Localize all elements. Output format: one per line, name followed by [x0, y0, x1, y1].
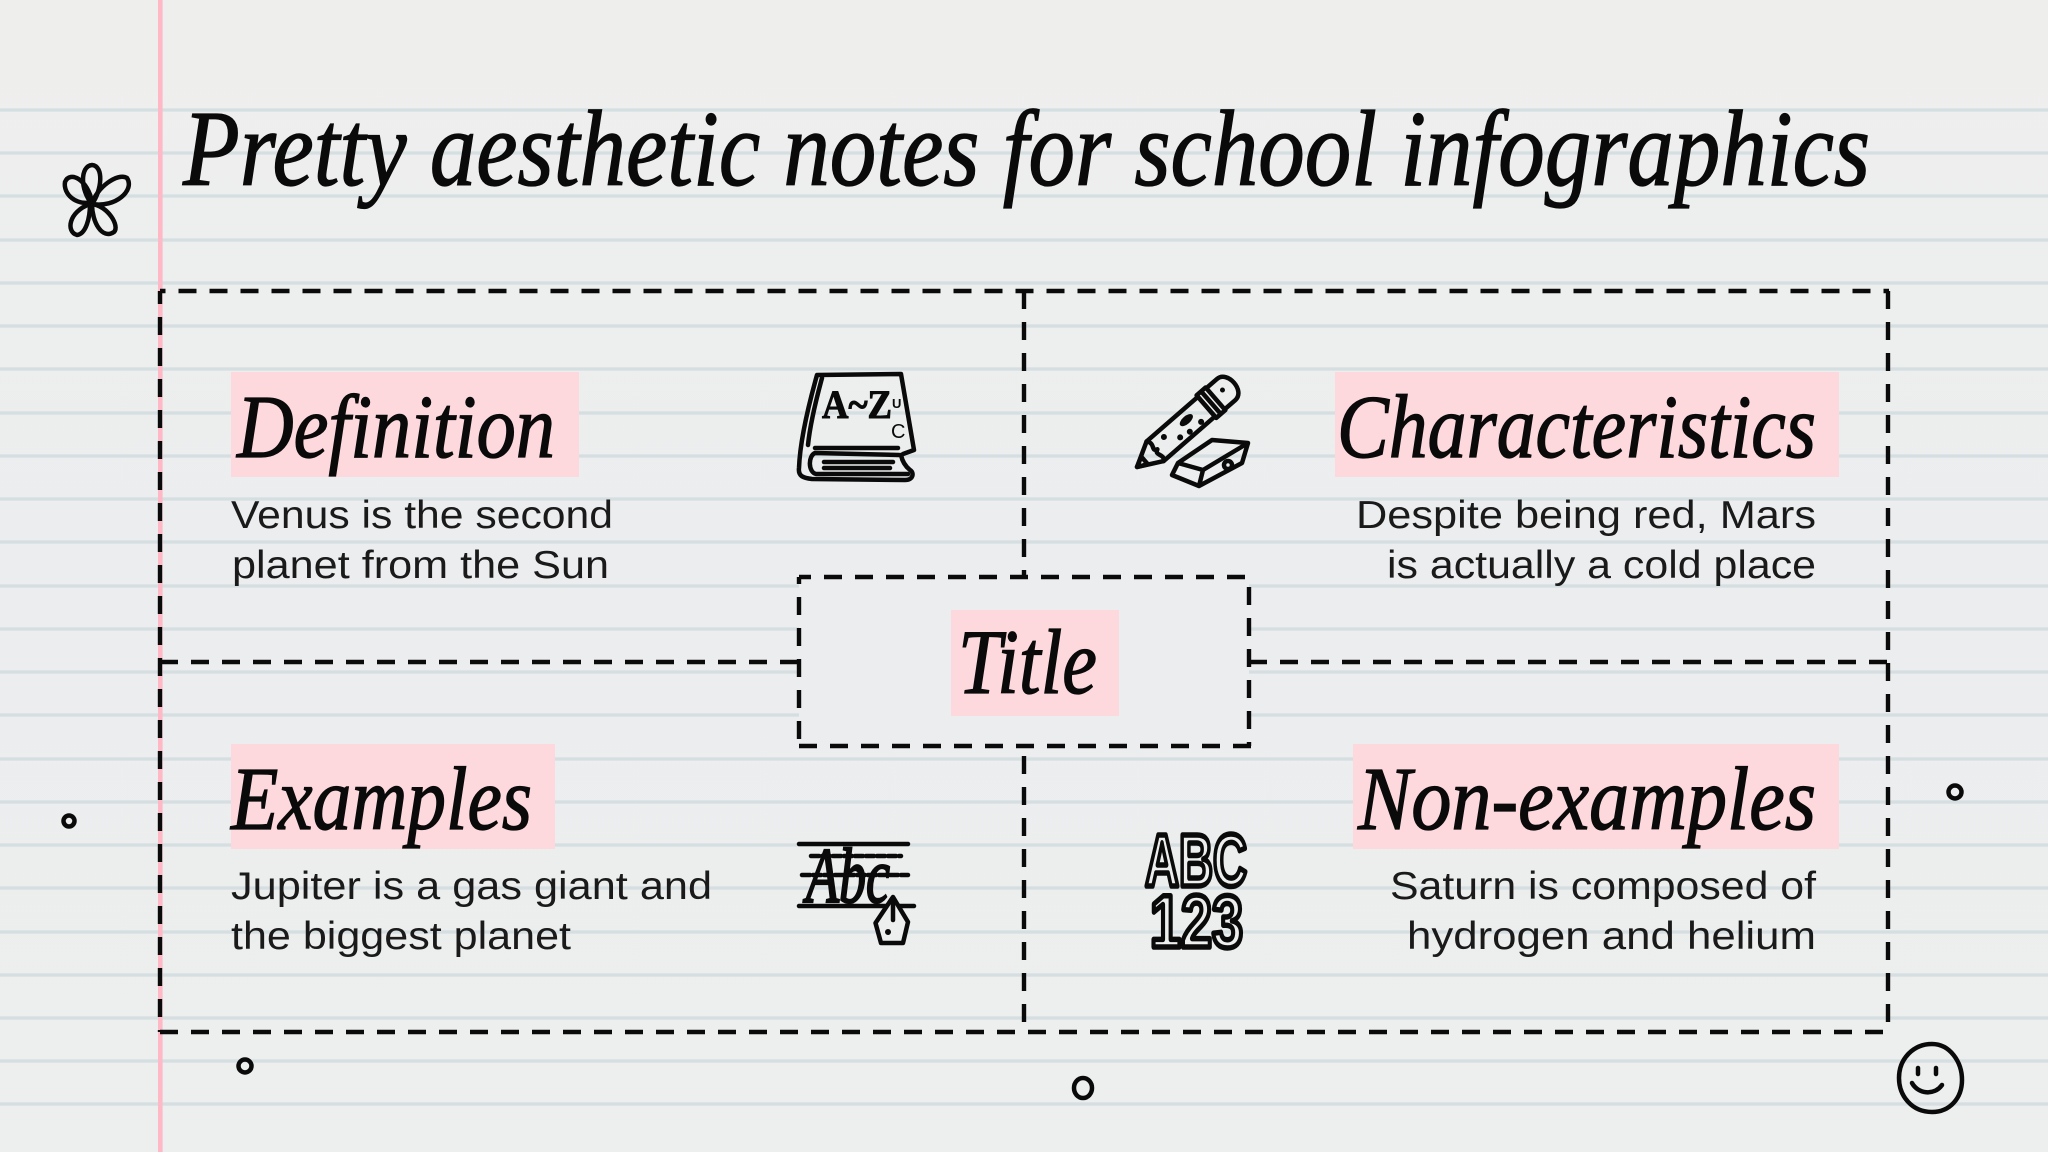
panel: definition	[231, 372, 613, 587]
panel: characteristics	[1335, 372, 1839, 587]
panel: central title box: Title	[958, 611, 1097, 713]
icon: dot bottom center	[1074, 1078, 1092, 1098]
icon: pencil and eraser	[1127, 371, 1248, 486]
panel: characteristics: Despite being red, Mars	[1356, 494, 1816, 537]
panel: non-examples: Saturn is composed of	[1390, 865, 1816, 908]
icon: dot right	[1948, 786, 1962, 798]
panel: non-examples: Non-examples	[1357, 750, 1816, 849]
panel: dashed organizer frame	[160, 291, 1889, 1032]
icon: A-Z book: C	[891, 421, 905, 443]
icon: smiley	[1899, 1044, 1962, 1112]
icon: dot bottom left	[238, 1060, 252, 1072]
icon: calligraphy Abc with pen nib: Abc	[803, 832, 890, 919]
icon: calligraphy Abc with pen nib	[799, 832, 914, 943]
panel: characteristics: Characteristics	[1337, 378, 1816, 477]
panel: characteristics: is actually a cold place	[1387, 544, 1816, 587]
icon: ABC 123 block letters	[1145, 819, 1247, 963]
icon: A-Z book	[799, 374, 914, 480]
panel: definition: Definition	[235, 378, 555, 477]
icon: A-Z book: U	[892, 396, 901, 411]
panel: non-examples: hydrogen and helium	[1407, 915, 1816, 958]
panel: central title box	[799, 577, 1251, 746]
icon: ABC 123 block letters: 123	[1150, 880, 1243, 963]
panel: definition: planet from the Sun	[232, 544, 609, 587]
panel: definition: Venus is the second	[231, 494, 613, 537]
panel: examples	[229, 744, 712, 958]
icon: ABC 123 block letters: ABC	[1145, 819, 1247, 902]
panel: non-examples	[1353, 744, 1839, 958]
icon: dot left	[64, 816, 74, 826]
panel: examples: the biggest planet	[231, 915, 571, 958]
panel: examples: Examples	[229, 750, 532, 849]
panel: examples: Jupiter is a gas giant and	[231, 865, 712, 908]
icon: A-Z book: A~Z	[822, 382, 892, 427]
icon: flower	[65, 165, 129, 235]
